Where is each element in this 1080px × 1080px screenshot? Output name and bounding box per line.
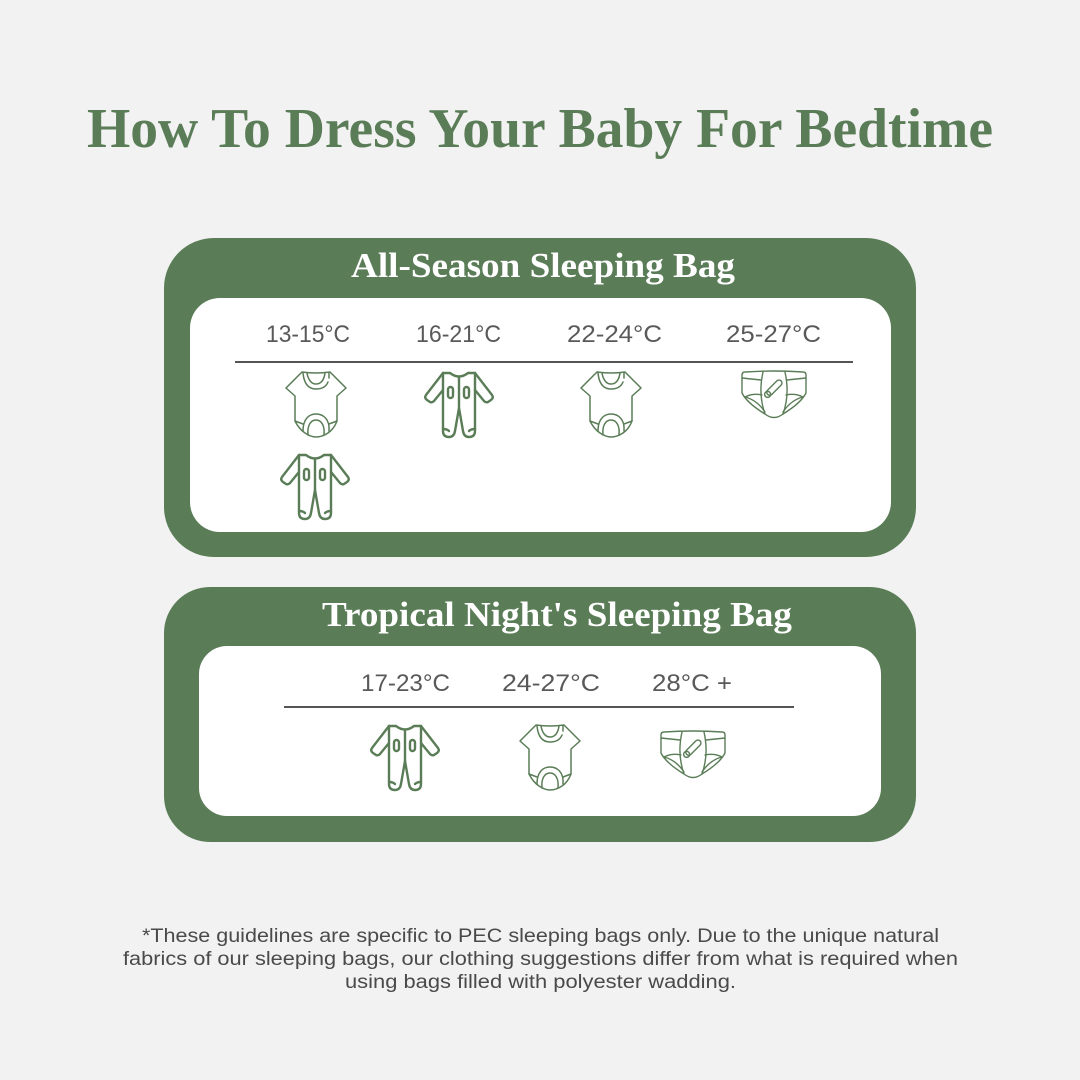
icon: bodysuit 22-24 bbox=[581, 372, 641, 437]
title: How To Dress Your Baby For Bedtime bbox=[87, 98, 993, 160]
footnote bbox=[123, 926, 958, 993]
footnote: using bags filled with polyester wadding. bbox=[345, 972, 736, 993]
footnote: *These guidelines are specific to PEC sleeping bags only. Due to the unique natural bbox=[142, 926, 939, 947]
panel: all-season sleeping bag bbox=[164, 238, 916, 557]
temperature headers: 24-27°C bbox=[502, 670, 600, 697]
temperature headers: 28°C + bbox=[652, 670, 732, 697]
temperature headers bbox=[361, 670, 732, 697]
temperature headers: 16-21°C bbox=[416, 321, 501, 348]
temperature headers: 22-24°C bbox=[567, 321, 662, 348]
icon: bodysuit 24-27 bbox=[520, 725, 580, 790]
icon: nappy 28+ bbox=[661, 731, 725, 778]
icon: nappy 25-27 bbox=[742, 371, 806, 418]
temperature headers: 17-23°C bbox=[361, 670, 450, 697]
icon: sleepsuit 16-21 bbox=[425, 373, 493, 437]
heading: tropical: Tropical Night's Sleeping Bag bbox=[322, 595, 793, 634]
panel: tropical night's sleeping bag bbox=[164, 587, 916, 842]
icon: sleepsuit 17-23 bbox=[371, 726, 439, 790]
icon: bodysuit 13-15 bbox=[286, 372, 346, 437]
icon: sleepsuit 13-15 bbox=[281, 455, 349, 519]
temperature headers: 25-27°C bbox=[726, 321, 821, 348]
heading: all-season: All-Season Sleeping Bag bbox=[351, 246, 736, 285]
temperature headers bbox=[266, 321, 821, 348]
footnote: fabrics of our sleeping bags, our clothing suggestions differ from what is required when bbox=[123, 949, 958, 970]
temperature headers: 13-15°C bbox=[266, 321, 350, 348]
